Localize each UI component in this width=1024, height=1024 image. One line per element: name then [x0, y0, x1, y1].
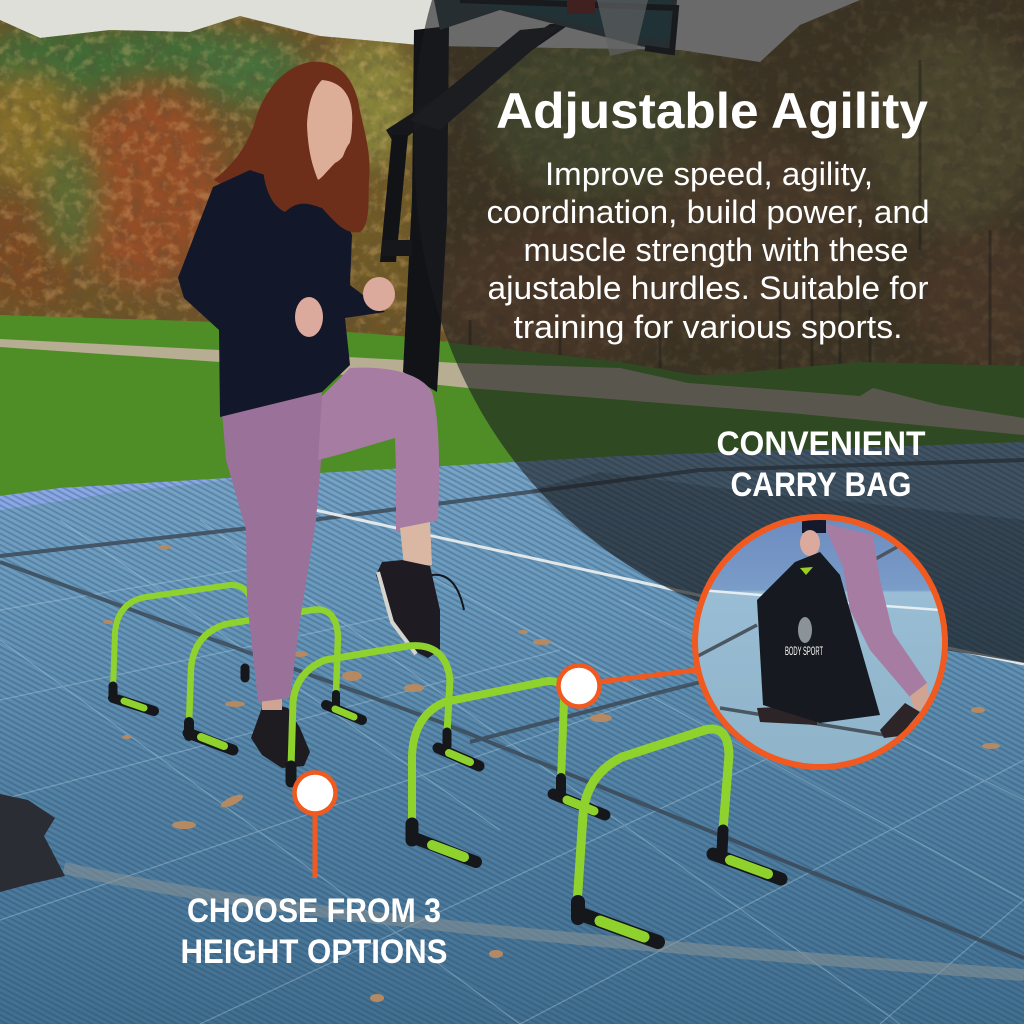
title: Adjustable Agility [496, 83, 928, 139]
inset: front shoe [757, 707, 817, 725]
court line: curved arc band [64, 868, 1024, 975]
court line: dark boundary lines [0, 460, 1024, 958]
label: choose from 3 height options: CHOOSE FROM 3 [187, 892, 441, 930]
court line: white line [315, 510, 1024, 664]
inset: dark court lines [698, 547, 897, 735]
hurdle 1 [113, 585, 251, 711]
connector line to carry bag inset [598, 670, 697, 682]
inset: walking legs [823, 523, 927, 697]
label: choose from 3 height options [180, 892, 448, 971]
woman: raised ankle [400, 522, 432, 566]
woman: left shoe [251, 702, 310, 768]
inset: bag logo [785, 617, 823, 658]
hurdle 3 [291, 646, 479, 782]
inset: court lines [700, 590, 940, 610]
inset: hand [800, 530, 820, 556]
description text block [486, 156, 930, 345]
description text block: training for various sports. [514, 309, 902, 345]
basketball court surface [0, 442, 1024, 1024]
label: convenient carry bag [716, 425, 926, 504]
woman: raised shoe [376, 560, 440, 658]
woman: raised leg [318, 368, 439, 532]
inset circle: carry bag photo [695, 517, 945, 767]
woman: right hand [363, 277, 395, 311]
basketball hoop stand and backboard [380, 0, 677, 392]
dark translucent overlay behind text [414, 0, 1024, 663]
inset: black drawstring bag [757, 552, 880, 723]
description text block: Improve speed, agility, [545, 156, 873, 192]
hurdle 5 [577, 729, 781, 942]
hurdle 2 [188, 610, 362, 750]
woman: hair back [214, 62, 370, 232]
fallen leaves [103, 545, 1000, 1002]
inset circle: carry bag photo: BODY SPORT [785, 644, 823, 658]
woman: jacket [178, 170, 385, 417]
description text block: muscle strength with these [524, 232, 908, 268]
marker: hurdle top callout [558, 666, 600, 706]
description text block: coordination, build power, and [486, 194, 930, 230]
woman: standing pose [178, 62, 464, 768]
label: convenient carry bag: CONVENIENT [716, 425, 926, 463]
description text block: ajustable hurdles. Suitable for [488, 270, 929, 306]
woman: left ankle [262, 696, 282, 710]
marker: height callout [294, 772, 336, 814]
label: convenient carry bag: CARRY BAG [730, 466, 912, 504]
woman: hair front locks [262, 119, 367, 232]
photo background: sky, trees, lawn [0, 0, 1024, 496]
inset: sleeve [802, 520, 826, 533]
woman: face [307, 80, 352, 180]
inset: rear shoe [880, 703, 920, 738]
connector line to height label [312, 814, 318, 878]
woman: standing leg [222, 392, 322, 702]
label: choose from 3 height options: HEIGHT OPTIONS [180, 933, 448, 971]
hurdle 4 [412, 681, 605, 862]
woman: left hand [295, 297, 323, 337]
folded black bag on court [0, 794, 65, 892]
darker mesh over court in shade [530, 472, 1024, 663]
